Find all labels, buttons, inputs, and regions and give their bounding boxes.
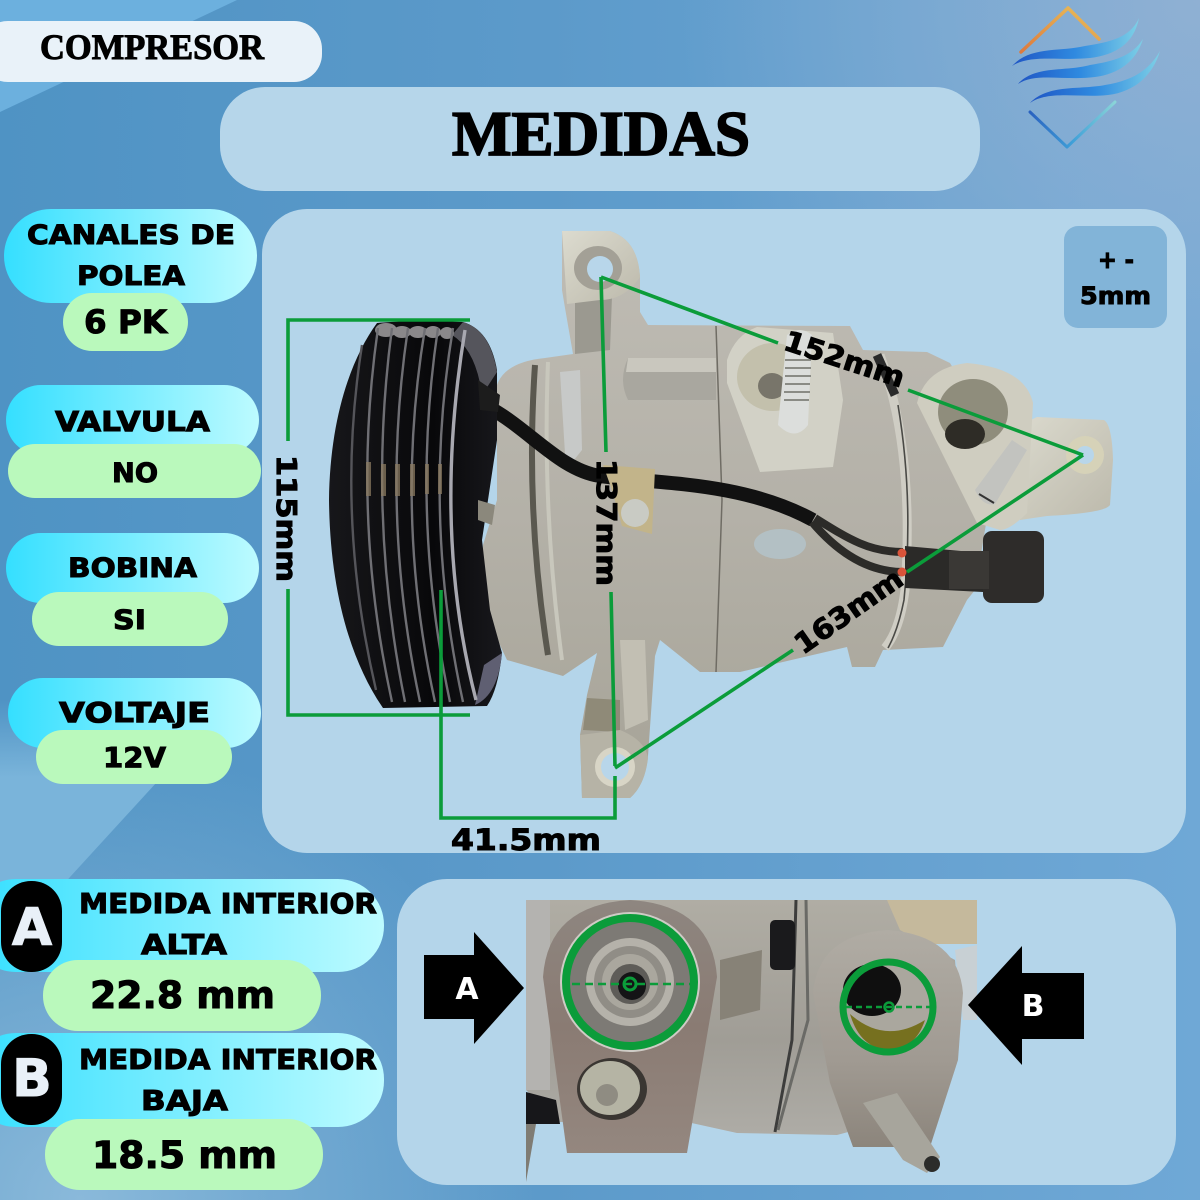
spec: medida interior alta: 22.8 mm [90,974,275,1017]
dimension: 115mm [270,320,470,715]
arrow B [968,946,1084,1065]
tolerance badge: + - [1098,246,1134,274]
heading: compresor: COMPRESOR [40,27,265,67]
spec: bobina: BOBINA [68,553,197,584]
spec: medida interior baja [0,1033,384,1190]
spec: medida interior alta: MEDIDA INTERIOR [79,887,377,920]
title: medidas [220,87,980,191]
panel: port detail [397,879,1176,1185]
spec: medida interior alta: ALTA [141,928,227,961]
spec: canales de polea: 6 PK [84,303,168,341]
green measure rings [566,918,933,1052]
dimension: 41.5mm [441,590,615,857]
spec: bobina: SI [113,605,146,636]
spec: valvula: NO [112,458,158,489]
arrow A [424,932,524,1044]
upper mount lug [562,231,640,304]
body shading [532,296,908,732]
title: medidas: MEDIDAS [452,98,750,169]
spec: voltaje [8,678,261,784]
flange A [543,900,717,1153]
spec: medida interior alta: A [12,898,52,958]
spec: valvula [6,385,261,498]
right mounting lug [1010,417,1113,520]
belt highlights [366,462,442,496]
spec: valvula: VALVULA [55,405,210,438]
connector [905,531,1044,603]
port photo [526,900,977,1182]
dimension: 163mm: 163mm [788,562,909,661]
dimension: 152mm: 152mm [780,324,909,394]
spec: medida interior baja: 18.5 mm [92,1134,277,1177]
spec: canales de polea: POLEA [77,261,185,292]
dimension: 41.5mm: 41.5mm [451,823,601,857]
spec: canales de polea: CANALES DE [27,220,235,251]
heading: compresor [0,21,322,82]
illustration: compressor [329,231,1113,798]
pulley [329,321,502,708]
spec: medida interior baja: B [12,1049,52,1109]
dimension: 137mm [590,277,623,766]
suction port flange [727,327,843,472]
panel: compressor photo [262,209,1186,857]
tolerance badge [1064,226,1167,328]
dimension: 137mm: 137mm [590,459,623,586]
spec: voltaje: 12V [103,741,166,774]
wire harness [490,408,906,576]
compressor body [480,231,990,798]
spec: voltaje: VOLTAJE [59,696,210,729]
tolerance badge: 5mm [1080,282,1151,310]
cable clip [603,465,655,534]
dimension: 163mm [615,455,1083,768]
pulley grooves [351,328,476,702]
spec: bobina [6,533,259,646]
arrow B: B [1022,989,1044,1024]
spec: canales de polea [4,209,257,351]
flange B [813,930,963,1173]
stud [778,330,812,434]
rib tops [375,323,454,339]
dimension: 152mm [601,277,1083,455]
lower mount lug [580,730,648,798]
dimension: 115mm: 115mm [270,455,303,582]
icon: brand logo [1012,8,1160,147]
spec: medida interior baja: MEDIDA INTERIOR [79,1043,377,1076]
arrow A: A [455,972,479,1007]
spec: medida interior alta [0,879,384,1031]
discharge port flange [917,363,1033,530]
spec: medida interior baja: BAJA [141,1084,228,1117]
